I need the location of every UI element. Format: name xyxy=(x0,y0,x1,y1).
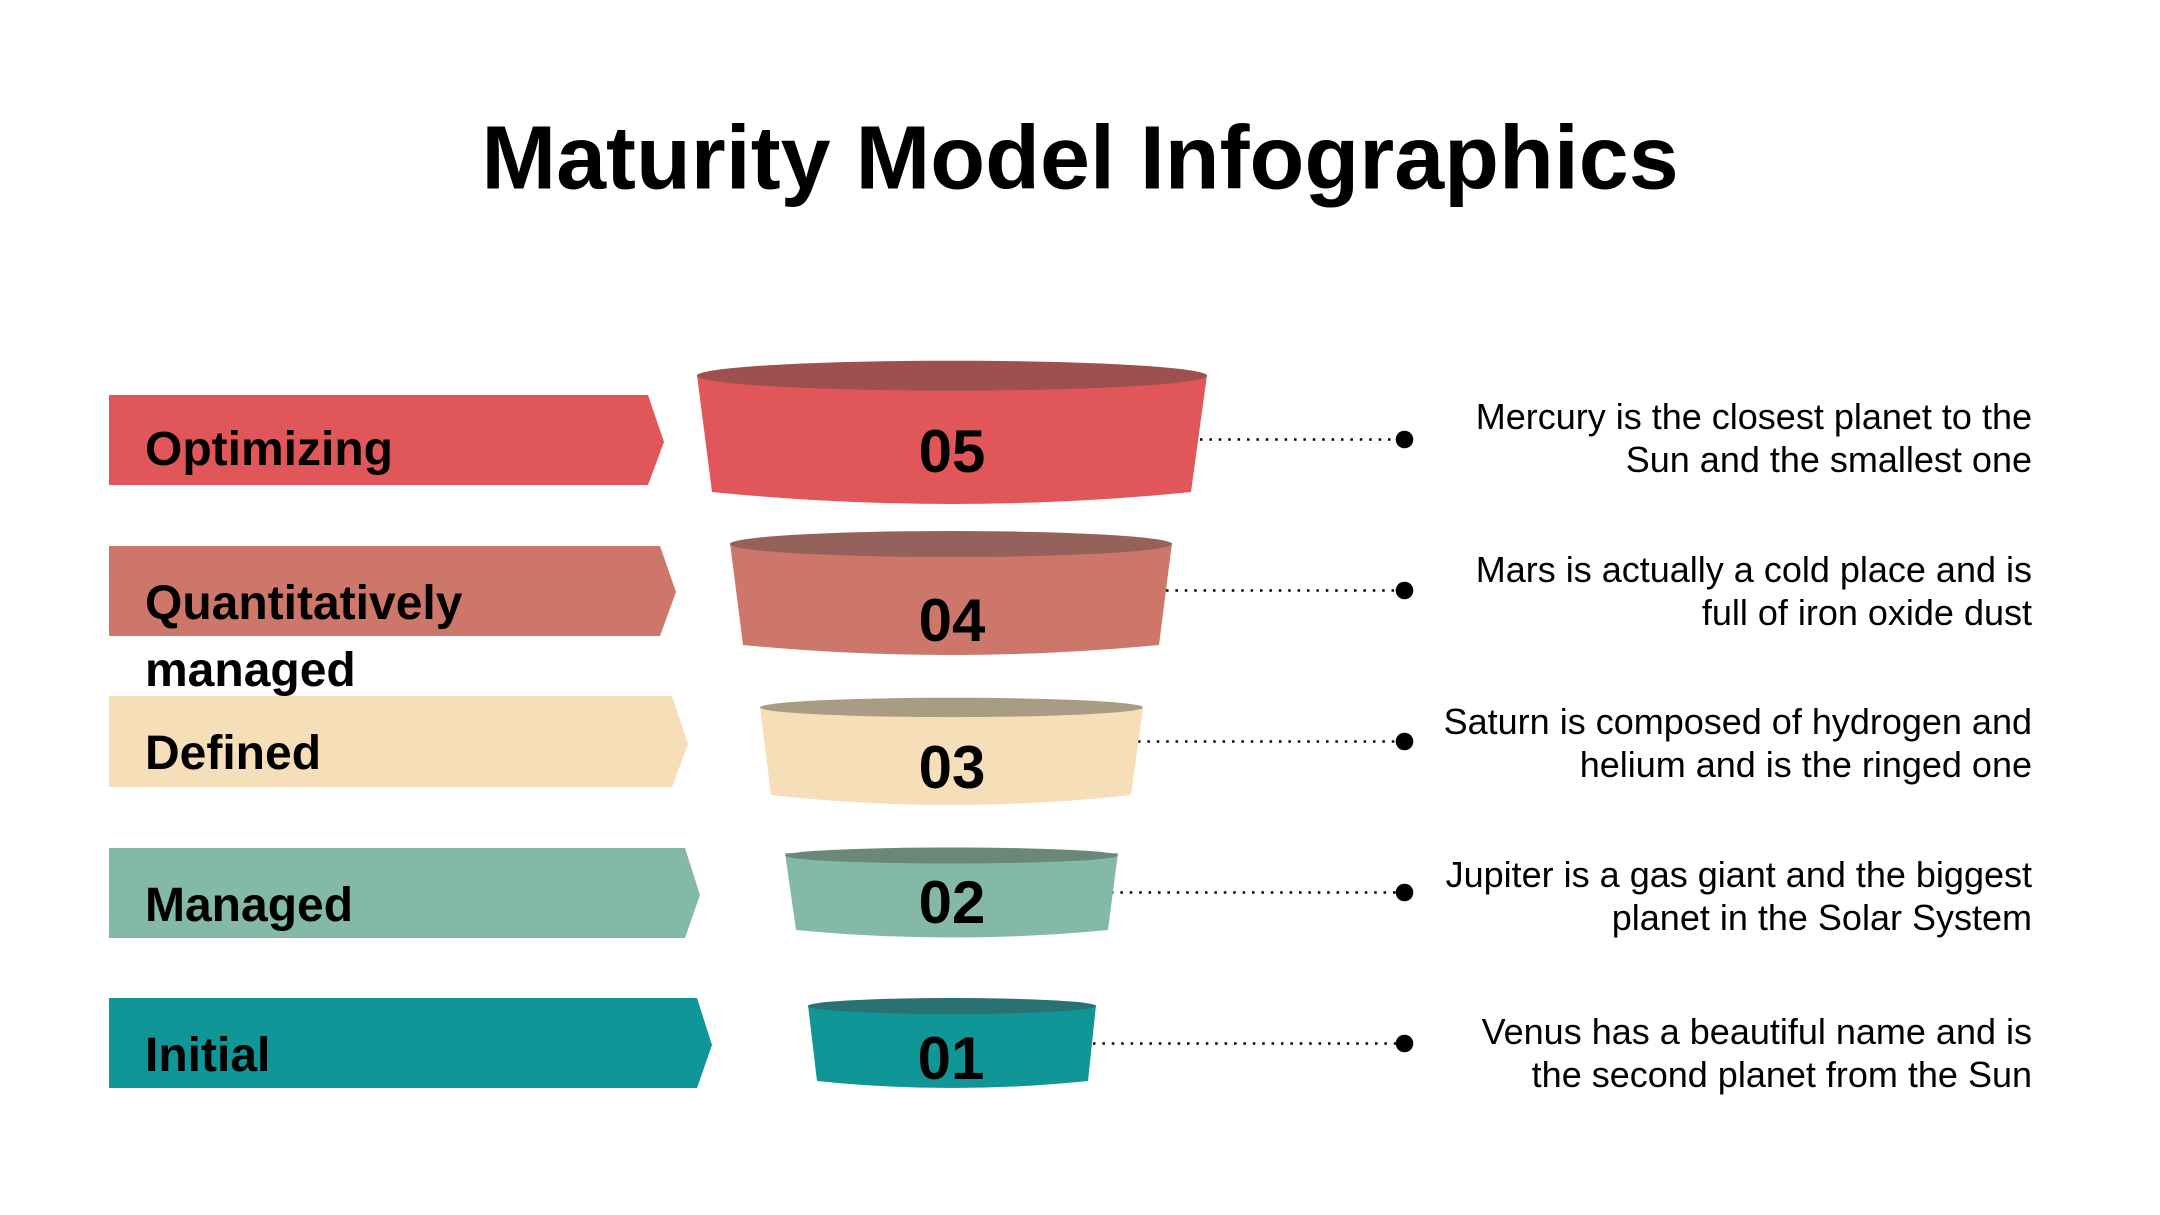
description: Mars: full of iron oxide dust xyxy=(1702,592,2032,633)
arrow label: Quantitatively managed: managed xyxy=(145,644,356,697)
funnel tier 02 xyxy=(785,848,1118,938)
arrow label: Optimizing xyxy=(109,395,664,485)
funnel tier 03 xyxy=(760,698,1143,805)
arrow label: Defined xyxy=(109,696,688,787)
arrow label: Defined: Defined xyxy=(145,727,321,780)
connector: level 5 xyxy=(1200,431,1413,448)
connector: level 4 xyxy=(1166,582,1413,599)
description: Saturn: Saturn is composed of hydrogen and xyxy=(1444,701,2032,742)
funnel tier 02: 02 xyxy=(919,869,985,936)
funnel tier 04 xyxy=(730,531,1172,655)
arrow label: Optimizing: Optimizing xyxy=(145,423,393,476)
title: Maturity Model Infographics xyxy=(481,108,1679,208)
description: Mercury: Mercury is the closest planet to the xyxy=(1476,396,2032,437)
funnel tier 01 xyxy=(808,998,1096,1092)
arrow label: Quantitatively managed: Quantitatively xyxy=(145,577,463,630)
connector: level 2 xyxy=(1111,884,1413,901)
funnel tier 01: 01 xyxy=(918,1025,984,1092)
arrow label: Quantitatively managed xyxy=(109,546,676,697)
arrow label: Initial xyxy=(109,998,712,1088)
arrow label: Managed: Managed xyxy=(145,879,353,932)
arrow label: Initial: Initial xyxy=(145,1029,270,1082)
description: Venus: Venus has a beautiful name and is xyxy=(1482,1011,2032,1052)
description: Mars: Mars is actually a cold place and is xyxy=(1476,549,2032,590)
description: Mercury: Sun and the smallest one xyxy=(1626,439,2032,480)
description: Venus: the second planet from the Sun xyxy=(1532,1054,2032,1095)
connector: level 3 xyxy=(1138,733,1413,750)
arrow label: Managed xyxy=(109,848,700,938)
funnel tier 05: 05 xyxy=(919,418,985,485)
funnel tier 03: 03 xyxy=(919,734,985,801)
description: Jupiter: planet in the Solar System xyxy=(1612,897,2032,938)
funnel tier 05 xyxy=(697,361,1207,504)
description: Saturn: helium and is the ringed one xyxy=(1580,744,2032,785)
description: Jupiter: Jupiter is a gas giant and the biggest xyxy=(1446,854,2032,895)
funnel tier 04: 04 xyxy=(919,587,986,654)
connector: level 1 xyxy=(1093,1035,1413,1052)
